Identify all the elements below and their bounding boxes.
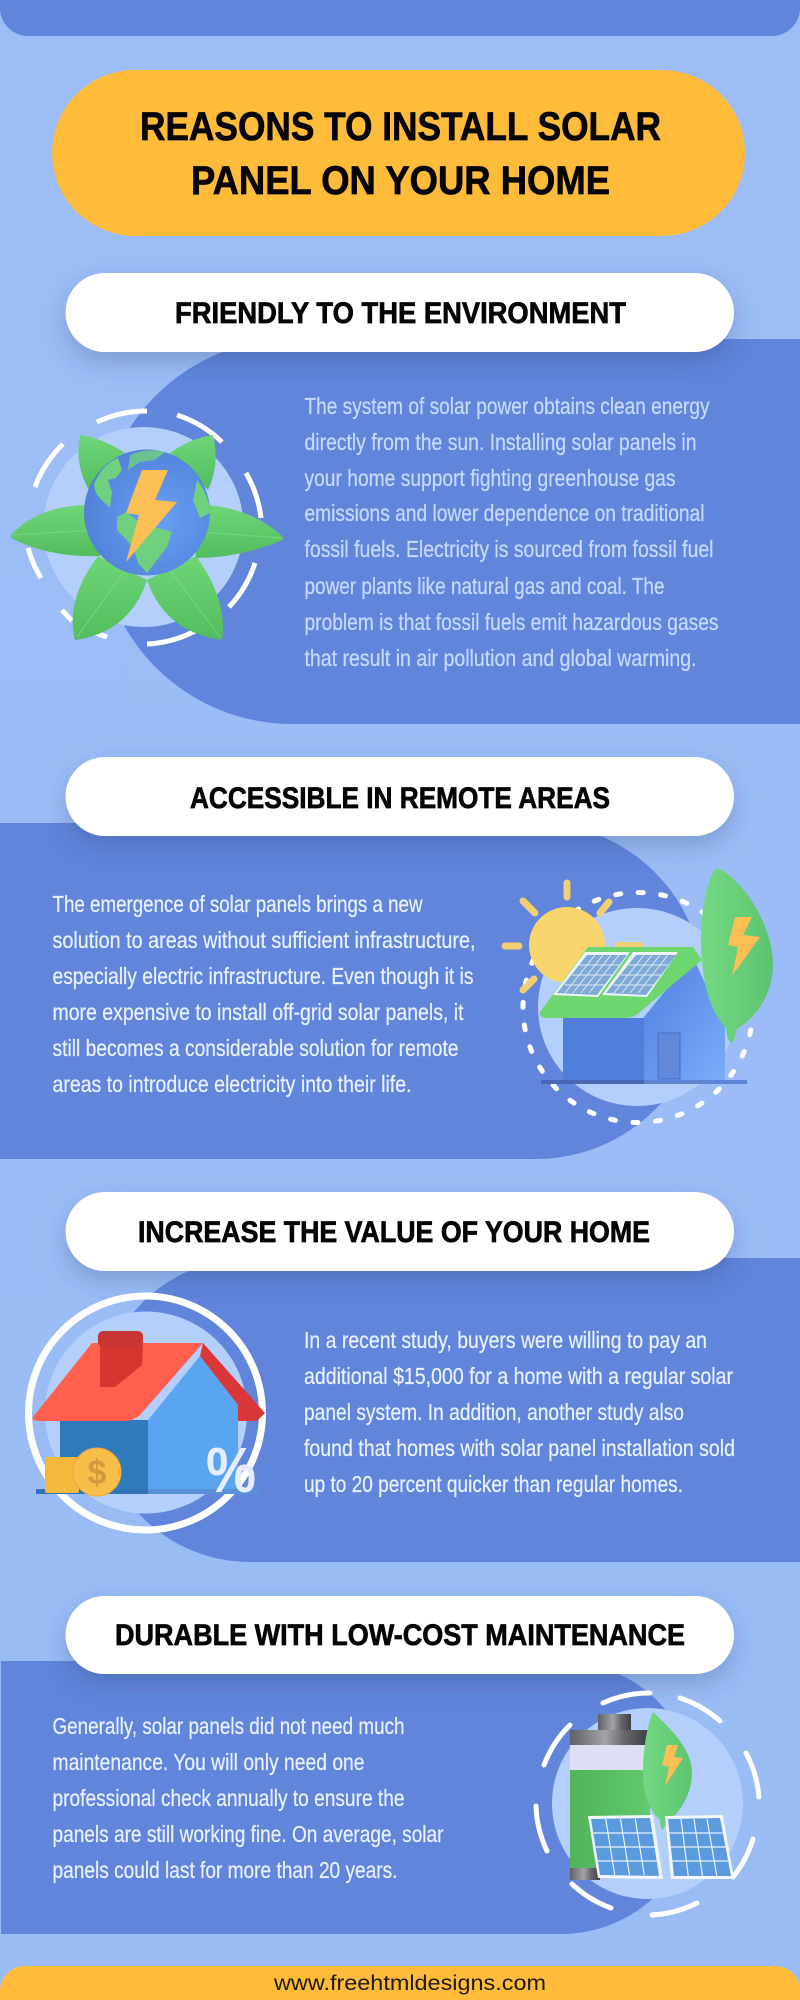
body text: more expensive to install off-grid solar panels, it	[52, 999, 464, 1025]
section: friendly to the environment	[11, 273, 800, 724]
body text: The system of solar power obtains clean energy	[304, 393, 710, 419]
icon: house with coins and percent: %	[206, 1434, 256, 1506]
footer bar: www.freehtmldesigns.com	[273, 1972, 546, 1995]
body text: especially electric infrastructure. Even though it is	[52, 963, 474, 989]
icon: battery with leaf and solar panels	[536, 1693, 759, 1915]
icon: house with coins and percent: $	[88, 1454, 107, 1492]
body text: panels could last for more than 20 years.	[52, 1857, 398, 1883]
body text: still becomes a considerable solution for remote	[52, 1035, 458, 1061]
section: durable with low-cost maintenance	[1, 1596, 759, 1934]
body text	[304, 1327, 735, 1497]
heading pill: FRIENDLY TO THE ENVIRONMENT	[175, 297, 626, 330]
body text: The emergence of solar panels brings a new	[52, 891, 423, 917]
body text: problem is that fossil fuels emit hazardous gases	[304, 609, 718, 635]
heading pill	[66, 1192, 734, 1271]
body text: found that homes with solar panel installation sold	[304, 1435, 735, 1461]
body text: your home support fighting greenhouse gas	[304, 465, 676, 491]
body text	[304, 393, 718, 671]
title: REASONS TO INSTALL SOLAR	[140, 105, 661, 149]
body text: solution to areas without sufficient infrastructure,	[52, 927, 476, 953]
heading pill: ACCESSIBLE IN REMOTE AREAS	[190, 782, 610, 815]
section: accessible in remote areas	[0, 757, 773, 1159]
title: PANEL ON YOUR HOME	[191, 159, 610, 203]
body text: directly from the sun. Installing solar panels in	[304, 429, 696, 455]
heading pill	[66, 273, 734, 352]
panel background	[98, 1258, 800, 1562]
body text: that result in air pollution and global warming.	[304, 645, 696, 671]
body text: emissions and lower dependence on traditional	[304, 500, 704, 526]
icon: earth with leaves and bolt	[11, 411, 283, 644]
heading pill: INCREASE THE VALUE OF YOUR HOME	[138, 1216, 650, 1249]
body text: additional $15,000 for a home with a regular solar	[304, 1363, 733, 1389]
panel background	[0, 823, 704, 1159]
body text: panel system. In addition, another study also	[304, 1399, 684, 1425]
icon: house with coins and percent	[28, 1296, 265, 1530]
body text: Generally, solar panels did not need much	[52, 1713, 404, 1739]
body text: In a recent study, buyers were willing to pay an	[304, 1327, 707, 1353]
section: increase the value of your home	[28, 1192, 800, 1562]
body text: fossil fuels. Electricity is sourced from fossil fuel	[304, 536, 714, 562]
footer bar	[0, 1966, 800, 2000]
body text	[52, 891, 476, 1097]
panel background	[1, 1661, 698, 1934]
body text: up to 20 percent quicker than regular homes.	[304, 1471, 683, 1497]
body text: areas to introduce electricity into their life.	[52, 1071, 412, 1097]
body text: maintenance. You will only need one	[52, 1749, 364, 1775]
body text: panels are still working fine. On average, solar	[52, 1821, 444, 1847]
heading pill	[66, 757, 734, 836]
panel background	[100, 339, 800, 724]
body text: power plants like natural gas and coal. The	[304, 573, 664, 599]
body text: professional check annually to ensure the	[52, 1785, 404, 1811]
heading pill: DURABLE WITH LOW-COST MAINTENANCE	[115, 1619, 685, 1652]
title	[52, 70, 745, 236]
icon: solar house with sun and leaf	[505, 868, 773, 1122]
top bar	[0, 0, 800, 36]
heading pill	[66, 1596, 734, 1674]
body text	[52, 1713, 444, 1883]
